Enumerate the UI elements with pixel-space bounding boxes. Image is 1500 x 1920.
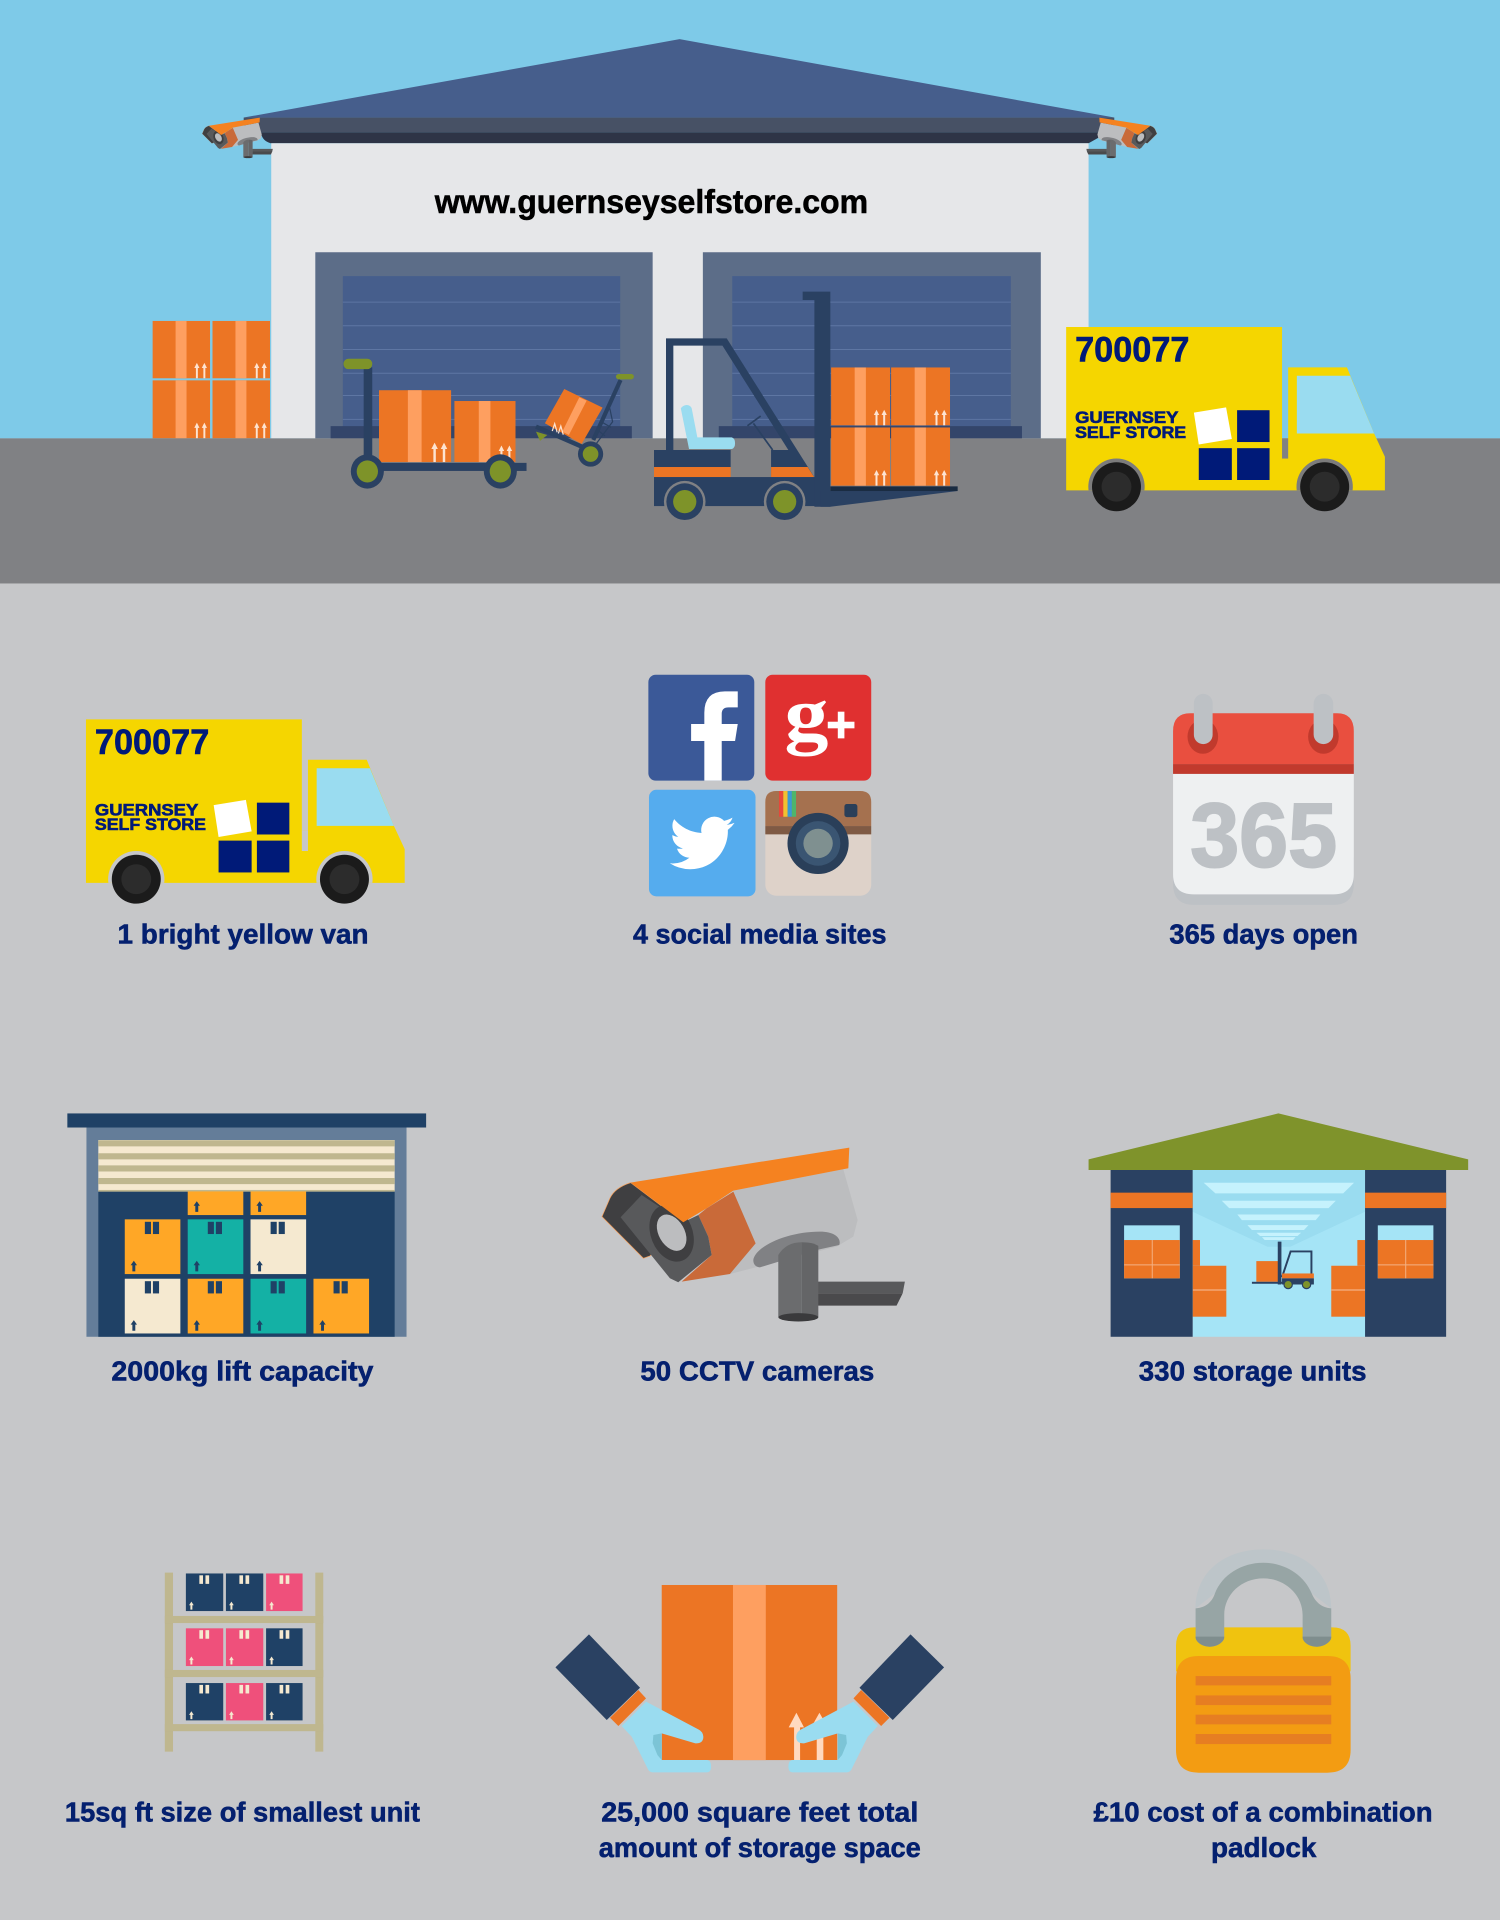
van logo squares [1194,407,1270,480]
item: social media [633,673,887,949]
label: storage space [599,1796,921,1863]
mini forklift [1252,1242,1314,1289]
item: shelving [65,1573,420,1827]
icon: hand truck with box [536,374,634,467]
item: storage space [555,1585,944,1863]
label: social: 4 social media sites [633,918,887,949]
website url: www.guernseyselfstore.com [434,184,868,221]
icon: cctv camera [602,1148,905,1321]
label: smallest unit: 15sq ft size of smallest unit [65,1796,420,1827]
icon: yellow van: SELF STORE [95,815,206,834]
label: padlock: £10 cost of a combination [1093,1796,1433,1827]
icon: left cctv camera [202,118,273,158]
van phone number: 700077 [1075,329,1189,369]
icon: google plus [765,673,871,781]
icon: right cctv camera [1086,118,1157,158]
item: padlock [1093,1549,1433,1863]
icon: yellow van: GUERNSEY [95,800,198,819]
van brand name [1075,408,1186,442]
panel: warehouse hero scene [0,0,1500,583]
warehouse building [244,39,1114,438]
icon: facebook [648,675,754,781]
item: storage unit [67,1113,426,1387]
icon: hero yellow van [1066,327,1385,511]
icon: instagram [765,791,871,896]
label: padlock: padlock [1211,1832,1317,1863]
item: storage units [1089,1113,1468,1387]
icon: combination padlock [1176,1549,1351,1773]
label: storage space: 25,000 square feet total [601,1796,918,1827]
label: lift capacity: 2000kg lift capacity [111,1356,374,1387]
icon: twitter [649,790,756,896]
label: van: 1 bright yellow van [118,918,369,949]
icon: hands holding box [555,1585,944,1772]
right roller door [703,252,1041,438]
icon: warehouse interior [1089,1113,1468,1337]
icon: yellow van [86,719,405,904]
item: cctv [602,1148,905,1387]
left roller door [315,252,653,438]
van brand name: GUERNSEY [1075,408,1178,427]
icon: calendar 365: 365 [1190,785,1337,886]
icon: flat trolley with boxes [343,359,527,489]
icon: calendar 365 [1173,694,1354,905]
label: storage space: amount of storage space [599,1832,921,1863]
item: calendar [1169,694,1358,949]
label: storage units: 330 storage units [1139,1356,1367,1387]
icon: forklift with pallet of boxes [654,292,958,522]
van brand name: SELF STORE [1075,423,1186,442]
warehouse roof [244,39,1114,118]
stacked boxes beside building [153,321,270,438]
sky [0,0,1500,438]
icon: yellow van: 700077 [95,722,209,762]
label: padlock [1093,1796,1433,1863]
icon: google plus: g [784,673,829,757]
icon: storage unit with boxes [67,1113,426,1337]
label: calendar: 365 days open [1169,918,1358,949]
ground [0,438,1500,583]
icon: shelf with boxes [165,1573,323,1752]
label: cctv: 50 CCTV cameras [640,1356,874,1387]
item: yellow van [86,719,405,949]
